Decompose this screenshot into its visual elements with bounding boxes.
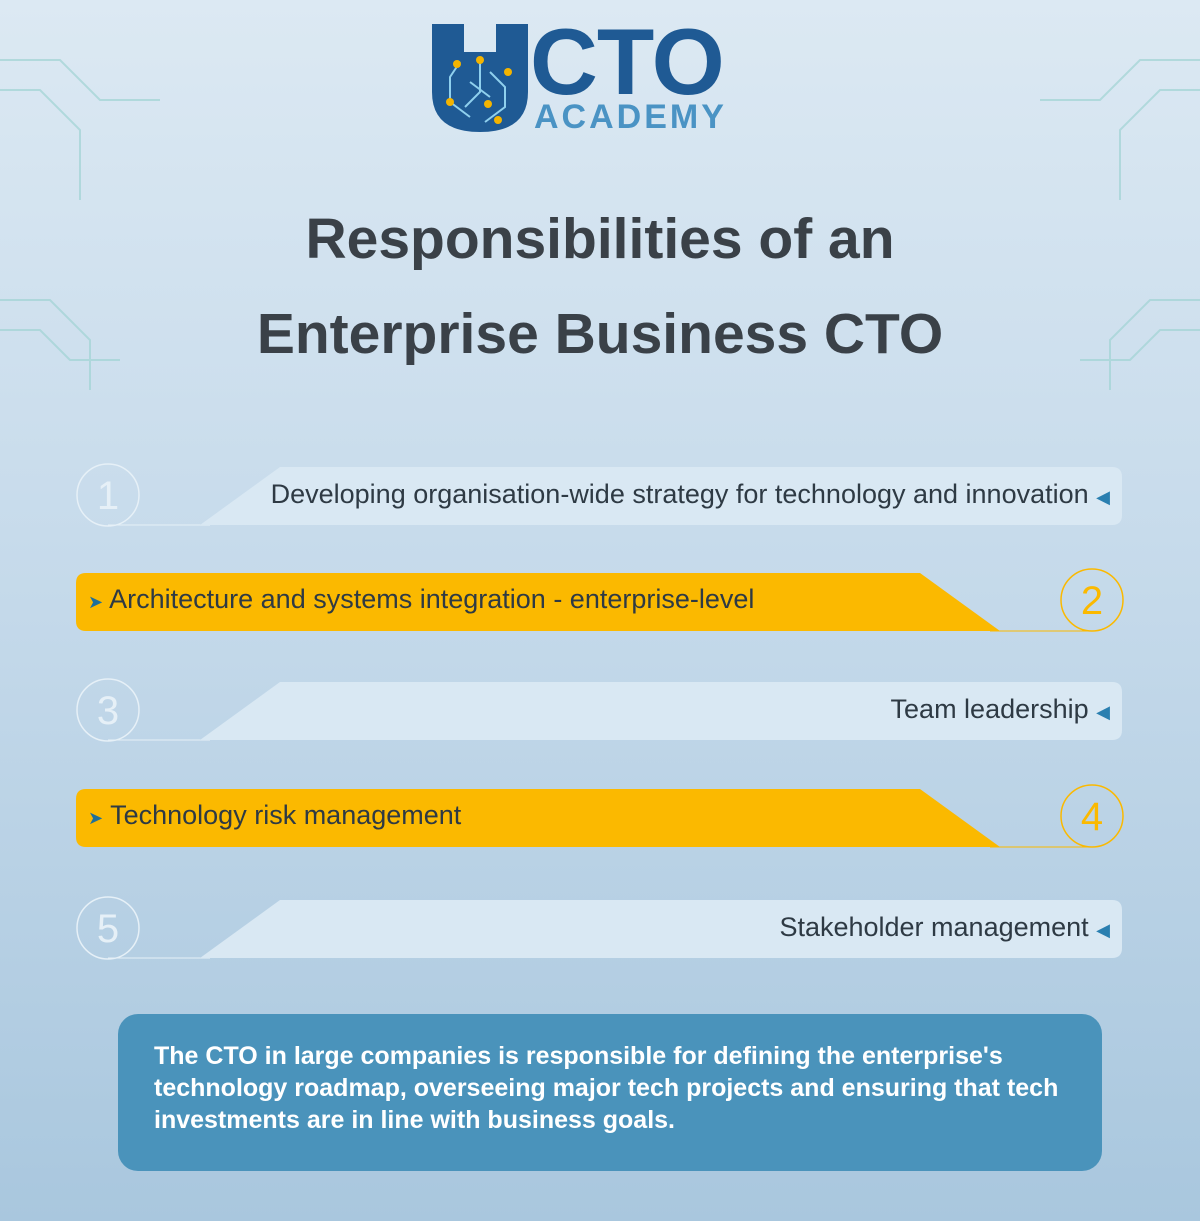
- item 1: 1: [97, 474, 119, 518]
- item 3: [77, 679, 1122, 741]
- title: [257, 207, 943, 366]
- item 4: [76, 785, 1123, 847]
- item 2: 2: [1081, 579, 1103, 623]
- summary box: The CTO in large companies is responsible for defining the enterprise's technology roadmap, overseeing major tech projects and ensuring that tech investments are in line with business goals.: [154, 1042, 1058, 1134]
- item 1: [77, 464, 1122, 526]
- text 1: Developing organisation-wide strategy for technology and innovation ◀: [271, 479, 1110, 509]
- item 4: 4: [1081, 795, 1103, 839]
- title: Enterprise Business CTO: [257, 302, 943, 366]
- decorative circuit lines: [0, 59, 1200, 390]
- item 5: 5: [97, 907, 119, 951]
- text 2: ➤ Architecture and systems integration - enterprise-level: [88, 584, 754, 614]
- item 3: 3: [97, 689, 119, 733]
- item 2: [76, 569, 1123, 631]
- summary box: [118, 1014, 1102, 1171]
- text 4: ➤ Technology risk management: [88, 800, 461, 830]
- logo: ACADEMY: [534, 98, 727, 136]
- title: Responsibilities of an: [305, 207, 895, 271]
- text 5: Stakeholder management ◀: [779, 912, 1110, 942]
- text 3: Team leadership ◀: [891, 694, 1110, 724]
- item 5: [77, 897, 1122, 959]
- logo text: CTO: [530, 9, 724, 114]
- icon: shield: [432, 24, 528, 132]
- logo: [432, 9, 727, 136]
